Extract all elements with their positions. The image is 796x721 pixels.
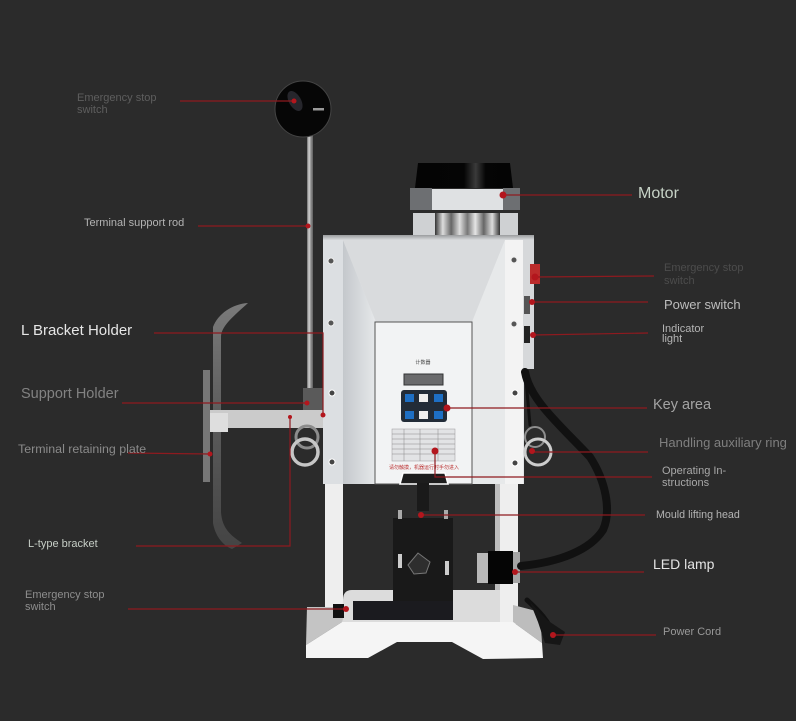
motor [410,163,520,237]
label: side emergency stop switch: Emergency stop [664,262,743,274]
label: terminal retaining plate: Terminal retaining plate [18,442,146,456]
label: power switch: Power switch [664,297,741,312]
label: mould lifting head: Mould lifting head [656,509,740,521]
instruction table [392,429,455,461]
frame, base and mould head [306,483,543,659]
machine body [323,235,540,484]
warning text: 请勿触摸，机器运行时手勿进入 [389,464,459,471]
label: LED lamp: LED lamp [653,556,715,572]
label: top emergency stop switch: Emergency stop [77,92,156,104]
label: lower emergency stop switch: switch [25,601,56,613]
label: support holder: Support Holder [21,386,119,402]
label: L-type bracket: L-type bracket [28,538,98,550]
label: side emergency stop switch: switch [664,275,695,287]
label: indicator light: light [662,333,682,345]
callout lines [122,101,656,635]
LED lamp [477,551,520,584]
label: lower emergency stop switch: Emergency stop [25,589,104,601]
label: L bracket holder: L Bracket Holder [21,322,132,339]
label: operating instructions: structions [662,477,710,489]
label: indicator light: Indicator [662,323,704,335]
label: handling auxiliary ring: Handling auxiliary ring [659,435,787,450]
callout dots [208,98,556,638]
icon: pole-mounted emergency stop disc [275,81,331,390]
panel title: 计数器 [415,359,431,366]
icon: handling auxiliary ring [525,427,551,465]
L bracket and terminal retaining plate [203,303,323,549]
label: motor: Motor [638,185,680,202]
control panel [375,322,472,484]
label: terminal support rod: Terminal support rod [84,217,184,229]
label: power cord: Power Cord [663,626,721,638]
power cord and conduit [521,372,607,635]
digital display [404,374,443,385]
label: operating instructions: Operating In- [662,465,726,477]
keypad [401,390,447,422]
label: top emergency stop switch: switch [77,104,108,116]
label: key area: Key area [653,397,712,413]
icon: power plug [530,602,565,645]
